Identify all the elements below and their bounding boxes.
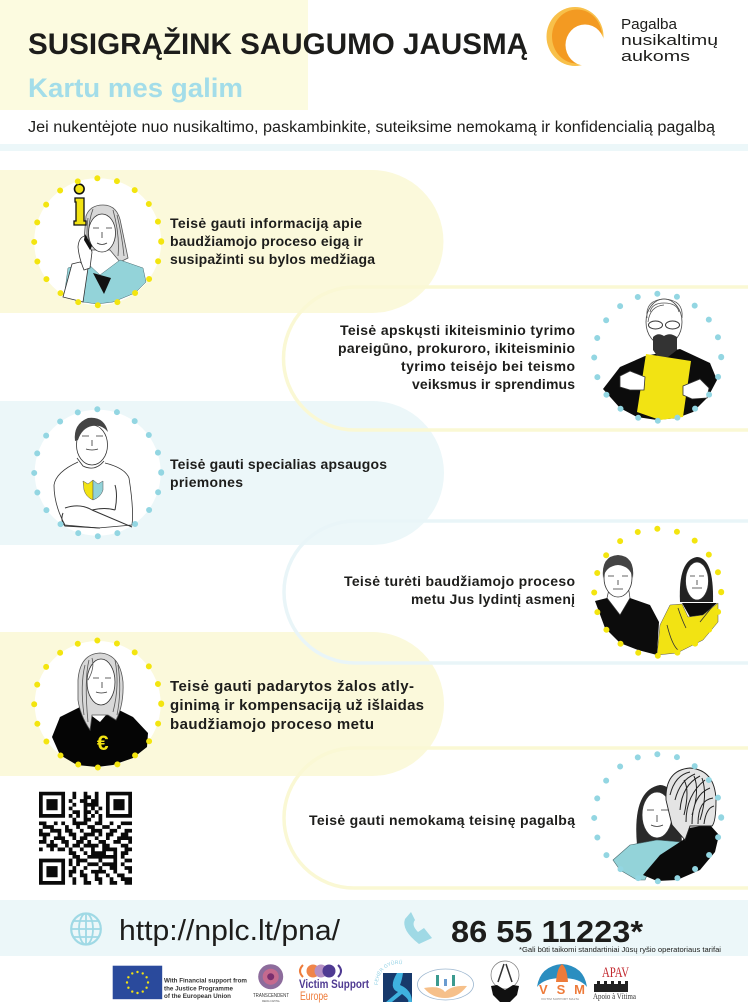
dotted ring: blue [594,754,721,881]
text: right to information: baudžiamojo proceso eigą ir [170,233,364,249]
logo: VSM umbrella: VICTIM SUPPORT MALTA [541,997,579,1001]
logo: Transcendent: TRANSCENDENT [253,993,290,999]
text: right to protection [170,456,387,490]
logo: Pagalba nusikaltimų aukoms [546,7,718,66]
text: right to accompanying person [344,573,575,607]
dotted ring: blue [34,409,161,536]
dotted ring: yellow [34,640,161,768]
panel: compensation background [0,632,444,776]
portrait: two people embracing [596,756,720,881]
logo: Transcendent [253,964,290,1003]
text: free legal aid: Teisė gauti nemokamą teisinę pagalbą [309,812,575,828]
logo: APAV [593,965,636,1001]
logo: Pagalba nusikaltimų aukoms: aukoms [621,48,690,65]
panel: legal aid outline [284,748,748,888]
contact band [0,900,748,956]
logo: Fehér Gyűrű: FEHÉR GYŰRŰ [374,960,402,985]
panel: right to information background [0,170,443,313]
logo: VSM umbrella [537,964,587,1001]
icon: euro sign: € [97,732,109,755]
text: right to protection: priemones [170,474,243,490]
text: right to information: Teisė gauti informaciją apie [170,215,362,231]
logo: VSM umbrella: VSM [539,982,585,997]
portrait: man with shield on sweater [35,410,161,536]
logo: Victim Support Europe: Victim Support [299,979,369,991]
icon: globe [71,914,101,944]
portrait: woman on phone with info icon [34,178,161,305]
text: compensation: Teisė gauti padarytos žalos atly- [170,678,414,695]
portrait: man and woman [595,530,720,655]
intro sentence: Jei nukentėjote nuo nusikaltimo, paskambinkite, suteiksime nemokamą ir konfidencialią pagalbą [28,119,715,136]
text: right to protection: Teisė gauti specialias apsaugos [170,456,387,472]
text: compensation: ginimą ir kompensaciją už išlaidas [170,697,424,714]
dotted ring: yellow [594,529,721,656]
tariff footnote: *Gali būti taikomi standartiniai Jūsų ryšio operatoriaus tarifai [519,945,721,954]
text: right to appeal: tyrimo teisėjo bei teismo [401,358,575,374]
dotted ring: yellow [34,178,161,305]
title: SUSIGRĄŽINK SAUGUMO JAUSMĄ [28,27,528,61]
logo: APAV: Apoio à Vítima [593,992,636,1001]
EU funding text: With Financial support from [164,978,247,984]
text: right to appeal: pareigūno, prokuroro, ikiteisminio [338,340,575,356]
logo: black hands emblem [491,961,519,1002]
logo: Pagalba nusikaltimų aukoms: Pagalba [621,16,678,33]
EU funding text [164,978,247,1000]
text: right to appeal: veiksmus ir sprendimus [412,376,575,392]
text: compensation: baudžiamojo proceso metu [170,716,374,733]
QR code [39,794,132,883]
portrait: bearded man holding yellow sheet [596,295,720,420]
text: right to accompanying person: metu Jus lydintį asmenį [411,591,575,607]
text: right to information [170,215,375,267]
logo: oval hands organisation [418,969,474,1000]
website url: http://nplc.lt/pna/ [119,915,341,947]
phone number: 86 55 11223* [451,914,644,949]
text: right to accompanying person: Teisė turėti baudžiamojo proceso [344,573,575,589]
portrait: long-haired person with euro sweater [35,641,161,767]
text: right to appeal: Teisė apskųsti ikiteisminio tyrimo [340,322,575,338]
dotted ring: blue [594,294,721,421]
logo: Pagalba nusikaltimų aukoms: nusikaltimų [621,32,718,49]
panel: right to protection background [0,401,444,545]
text: compensation [170,678,424,733]
logo: APAV: APAV [602,965,629,981]
EU funding text: the Justice Programme [164,986,233,992]
panel: accompanying person outline [284,521,748,663]
text: right to appeal [338,322,575,392]
icon: telephone [404,912,432,944]
header divider band [0,144,748,151]
logo: EU flag [113,966,162,999]
logo: Victim Support Europe [299,964,369,1003]
panel: right to appeal outline [284,287,748,430]
logo: Transcendent: MEDIA CAPITAL [262,999,280,1003]
EU funding text: of the European Union [164,993,231,1000]
logo: Victim Support Europe: Europe [300,991,328,1003]
subtitle: Kartu mes galim [28,73,243,103]
header background block [0,0,308,110]
text: right to information: susipažinti su bylos medžiaga [170,251,375,267]
logo: Fehér Gyűrű [374,960,412,1002]
